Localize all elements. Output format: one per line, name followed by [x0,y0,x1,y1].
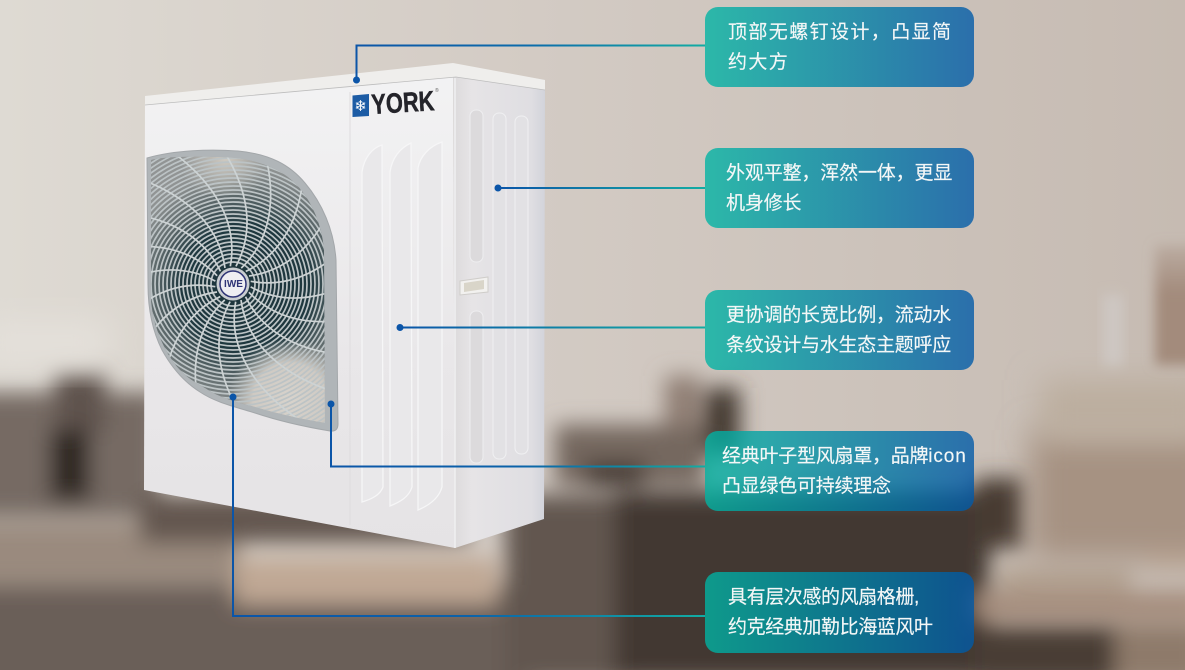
icon: York logo: ❄ [354,97,367,115]
connector: side surface [494,184,705,192]
connector: fan grille [230,394,705,616]
fan hub badge [216,268,250,300]
front ribs [362,142,442,510]
callout: proportions: 条纹设计与水生态主题呼应 [726,335,951,356]
callout: flat exterior: 机身修长 [726,193,801,214]
callout: fan guard: 凸显绿色可持续理念 [722,476,891,497]
icon: York logo: YORK [370,85,435,120]
callout: fan guard [705,431,974,511]
fan grille [151,156,325,423]
connector: top panel [353,46,705,84]
callout: top panel: 顶部无螺钉设计，凸显简 [728,22,952,43]
fan hub badge: IWE [224,279,243,290]
callout: proportions: 更协调的长宽比例，流动水 [726,305,951,326]
callout: fan guard: 经典叶子型风扇罩，品牌icon [722,446,967,467]
callout: flat exterior [705,148,974,228]
connector: fan guard [328,400,705,466]
callout: top panel: 约大方 [728,52,789,73]
fan guard frame [147,150,338,431]
unit side face [453,64,545,548]
connector: ribbed panel [396,324,705,331]
callout: fan grille: 具有层次感的风扇格栅, [728,587,919,608]
callout: top panel [705,7,974,87]
side ribs [470,110,483,463]
icon: York logo: ® [435,87,439,94]
top panel lip [145,63,545,105]
icon: York logo [352,85,439,120]
unit front face [144,64,455,548]
side handle [460,277,488,295]
callout: proportions [705,290,974,370]
callout: fan grille [705,572,974,653]
callout: flat exterior: 外观平整，浑然一体，更显 [726,163,952,184]
callout: fan grille: 约克经典加勒比海蓝风叶 [728,617,933,638]
product: York outdoor unit [144,63,545,548]
